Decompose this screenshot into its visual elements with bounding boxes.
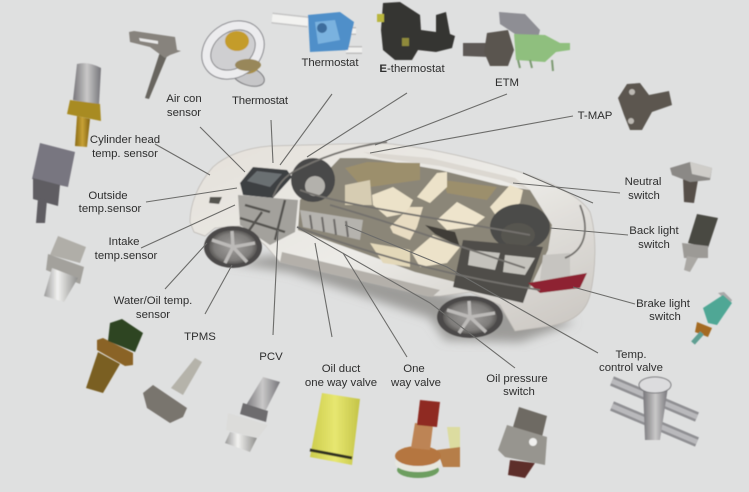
cabin interior	[298, 158, 552, 296]
spare wheel hub	[501, 223, 535, 247]
label: temp control valve: control valve	[599, 362, 663, 374]
icon: thermostat round	[190, 9, 276, 91]
icon: air con sensor	[129, 31, 181, 99]
label: oil duct one way valve: Oil duct	[322, 363, 361, 375]
subframe dark parts	[240, 200, 285, 240]
label: E-thermostat: E-thermostat	[379, 63, 445, 75]
transmission detail	[310, 215, 348, 237]
label: cylinder head temp sensor: temp. sensor	[92, 148, 158, 160]
icon: TPMS	[143, 358, 202, 423]
front wheel rim	[209, 230, 257, 264]
label: outside temp sensor: Outside	[88, 190, 128, 202]
icon: back light switch	[682, 214, 718, 272]
icon: T-MAP	[618, 83, 672, 130]
tail light	[528, 273, 587, 293]
label: cylinder head temp sensor: Cylinder head	[90, 134, 160, 146]
icon: oil duct one way valve	[310, 393, 360, 465]
label: water/oil temp sensor: Water/Oil temp.	[114, 295, 192, 307]
icon: intake temp sensor	[44, 236, 86, 302]
door sill shading	[280, 252, 440, 297]
label: air con sensor: sensor	[167, 107, 201, 119]
leader lines	[141, 93, 635, 368]
spare wheel	[490, 204, 550, 250]
label: thermostat upper: Thermostat	[302, 57, 359, 69]
icon: PCV	[225, 377, 280, 452]
icon: ETM	[463, 12, 570, 71]
label: air con sensor: Air con	[166, 93, 202, 105]
label: neutral switch: Neutral	[625, 176, 661, 188]
icon: temp control valve	[612, 377, 697, 442]
rear wheel rim	[443, 300, 497, 334]
icon: water/oil temp sensor	[86, 319, 143, 393]
illustration: cutaway car	[190, 142, 595, 342]
tail light housing	[540, 253, 570, 280]
front wheel tyre	[204, 226, 262, 268]
front air intake	[209, 197, 222, 204]
rear mechanics	[453, 240, 543, 303]
label: ETM: ETM	[495, 77, 519, 89]
label: back light switch: Back light	[629, 225, 680, 237]
label: oil pressure switch: switch	[503, 386, 535, 398]
icon: thermostat housing	[272, 12, 362, 52]
far front tyre	[291, 158, 335, 202]
label: oil pressure switch: Oil pressure	[486, 373, 548, 385]
car body shell	[190, 143, 595, 331]
label: one way valve: way valve	[390, 377, 441, 389]
label: oil duct one way valve: one way valve	[305, 377, 377, 389]
label: brake light switch: switch	[649, 311, 681, 323]
label: outside temp sensor: temp.sensor	[79, 203, 142, 215]
icon: cylinder head temp sensor	[67, 63, 101, 147]
icon: one way valve	[395, 400, 460, 478]
label: water/oil temp sensor: sensor	[136, 309, 170, 321]
label: intake temp sensor: Intake	[108, 236, 140, 248]
front wheel spokes	[212, 231, 255, 263]
label: PCV: PCV	[259, 351, 283, 363]
carpet and seats	[345, 162, 523, 267]
label: T-MAP: T-MAP	[578, 110, 612, 122]
label: neutral switch: switch	[628, 190, 660, 202]
label: TPMS: TPMS	[184, 331, 216, 343]
label: brake light switch: Brake light	[636, 298, 691, 310]
icon: brake light switch	[693, 292, 732, 343]
engine	[240, 167, 292, 198]
rear wheel tyre	[437, 296, 503, 338]
car ground shadow	[225, 255, 575, 342]
label: one way valve: One	[403, 363, 425, 375]
icon: outside temp sensor	[32, 143, 75, 223]
label: intake temp sensor: temp.sensor	[95, 250, 158, 262]
front subframe	[238, 195, 298, 245]
pipework	[273, 142, 585, 290]
label: temp control valve: Temp.	[615, 349, 647, 361]
transmission	[300, 210, 363, 240]
rear mechanics highlights	[468, 250, 535, 275]
icon: oil pressure switch	[498, 407, 547, 478]
icon: neutral switch	[670, 162, 712, 203]
engine cover highlight	[247, 171, 282, 187]
label: back light switch: switch	[638, 239, 670, 251]
roof opening highlight	[363, 152, 530, 190]
far front hub	[305, 176, 325, 196]
rear wheel spokes	[447, 301, 495, 333]
label: thermostat: Thermostat	[232, 95, 289, 107]
icon: E-thermostat	[377, 2, 455, 60]
